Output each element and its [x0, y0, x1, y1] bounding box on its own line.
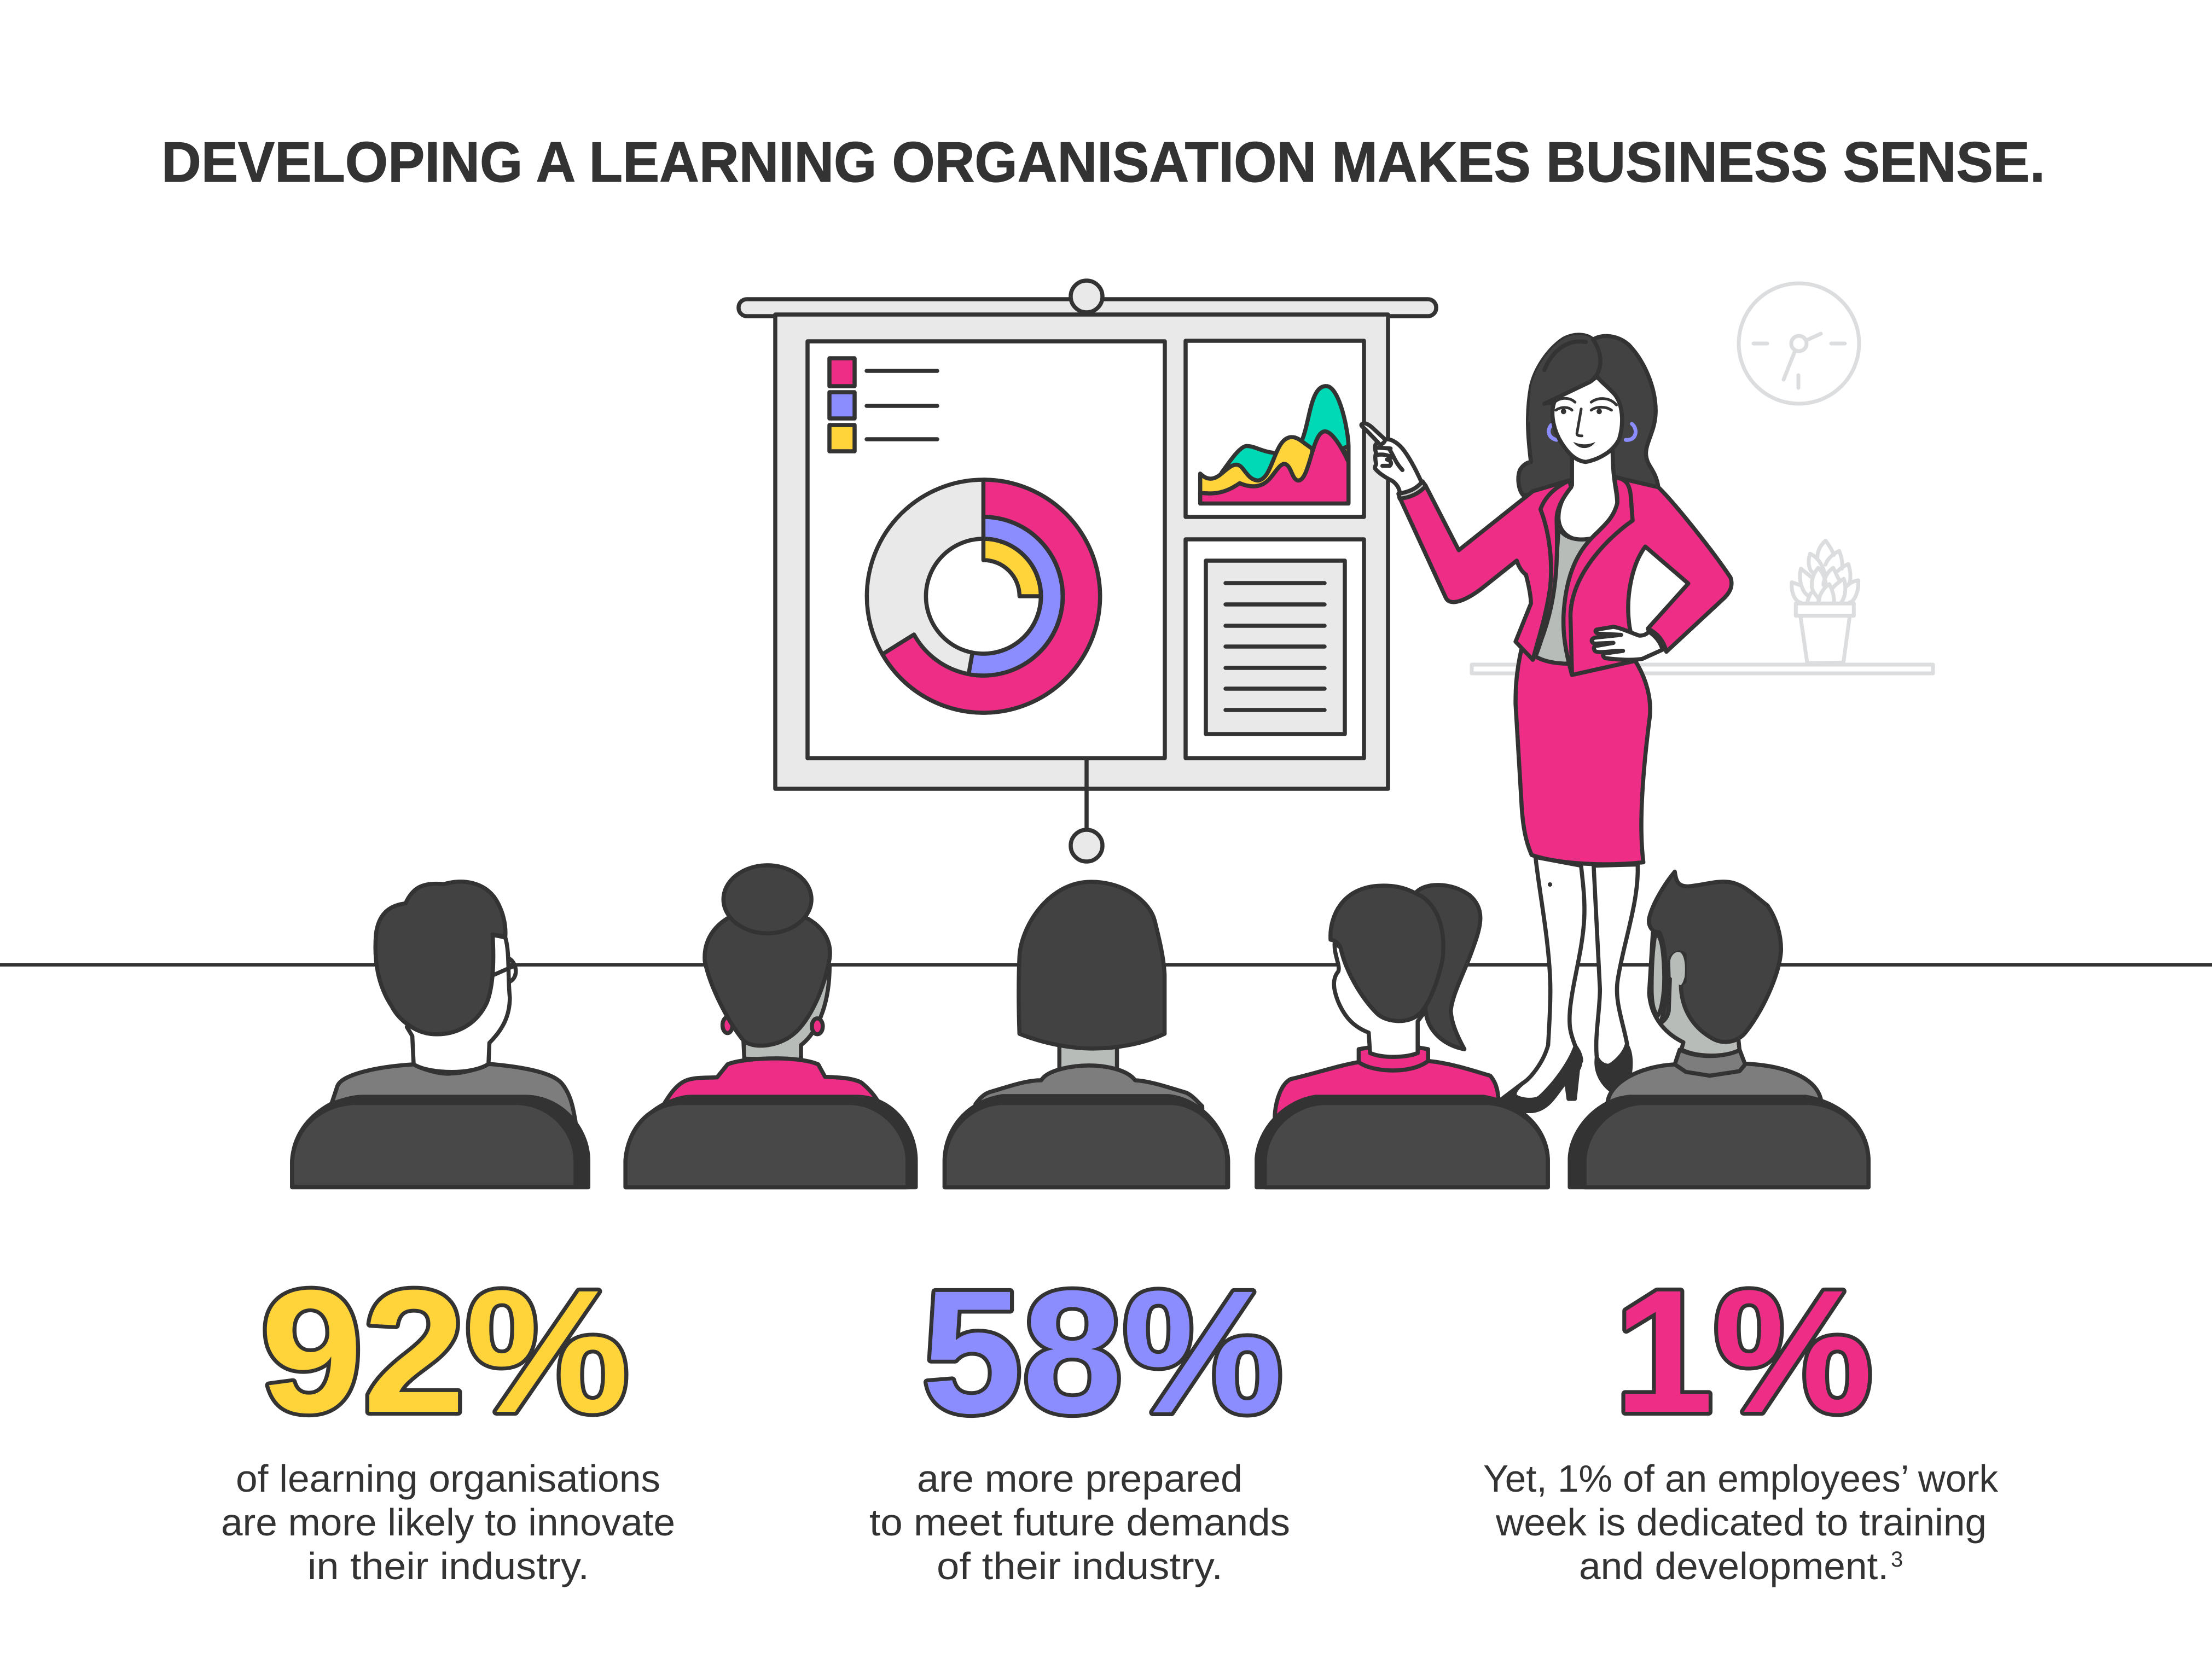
chair — [292, 1097, 588, 1188]
screen frame — [775, 315, 1388, 789]
front hair — [1528, 335, 1600, 423]
chair — [625, 1097, 916, 1188]
ponytail — [1415, 885, 1481, 1049]
icon: wall clock — [1739, 283, 1859, 404]
shelf — [1472, 665, 1933, 673]
presenter — [1361, 335, 1732, 1111]
hair bun — [723, 865, 811, 933]
caption 1%: week is dedicated to training — [1495, 1501, 1987, 1544]
legend — [829, 358, 937, 451]
chair — [945, 1096, 1228, 1188]
audience member 4 with ponytail — [1257, 885, 1548, 1188]
presenter body and head — [1401, 335, 1732, 864]
stat: 1 percent — [1483, 1253, 1999, 1587]
face — [1545, 377, 1622, 462]
neck and head skin — [744, 966, 829, 1060]
glasses lens and arm — [1652, 934, 1664, 1016]
jacket — [1607, 1064, 1821, 1120]
head and neck — [407, 935, 510, 1072]
caption 1% — [1483, 1457, 1999, 1587]
screen roller bar — [739, 299, 1436, 316]
audience member 5 with quiff — [1570, 872, 1868, 1188]
audience member 1 with glasses — [292, 882, 588, 1188]
top — [1275, 1061, 1499, 1120]
caption 58%: of their industry. — [937, 1545, 1223, 1587]
caption 92%: are more likely to innovate — [221, 1501, 675, 1544]
hair — [1649, 872, 1781, 1042]
projector screen — [739, 281, 1436, 862]
ear — [1670, 952, 1685, 985]
stat: 58 percent — [869, 1254, 1290, 1587]
figure 1%: 1% — [1614, 1253, 1873, 1449]
floor line — [0, 963, 2212, 967]
caption 1%: 3 — [1891, 1547, 1903, 1572]
stat: 92 percent — [221, 1253, 675, 1587]
hair — [375, 882, 506, 1034]
area chart — [1200, 386, 1349, 504]
jacket left side and pointing arm — [1401, 480, 1571, 660]
back hair — [1518, 335, 1658, 495]
caption 58% — [869, 1457, 1290, 1587]
hand on hip — [1592, 627, 1667, 660]
jacket — [976, 1066, 1202, 1120]
top knob — [1071, 281, 1102, 312]
chair — [1570, 1097, 1868, 1188]
earrings — [1549, 424, 1636, 440]
skin mark on leg — [1548, 882, 1552, 887]
chair — [1257, 1097, 1548, 1188]
pull cord and knob — [1071, 758, 1102, 862]
donut chart — [867, 480, 1100, 713]
caption 92%: of learning organisations — [236, 1457, 660, 1500]
figure 92%: 92% — [260, 1253, 629, 1449]
panel: area chart slide — [1186, 341, 1364, 517]
caption 92% — [221, 1457, 675, 1587]
glasses — [494, 959, 516, 982]
presenter legs and shoes — [1501, 857, 1638, 1111]
ear — [811, 984, 820, 1006]
jacket — [664, 1058, 879, 1120]
panel: donut chart slide — [808, 341, 1165, 758]
neck and chest — [1559, 451, 1617, 540]
icon: potted plant — [1792, 540, 1859, 664]
jacket right side and arm — [1564, 477, 1732, 675]
caption 58%: are more prepared — [917, 1457, 1243, 1500]
audience member 3 with bob — [945, 882, 1228, 1188]
figure 58%: 58% — [922, 1254, 1283, 1450]
sweater — [330, 1064, 576, 1122]
caption 1%: Yet, 1% of an employees’ work — [1483, 1457, 1999, 1500]
neck — [1059, 1045, 1117, 1070]
skirt — [1516, 650, 1650, 864]
caption 1%: and development. — [1579, 1545, 1889, 1587]
facial features — [1554, 398, 1617, 448]
right earring — [812, 1019, 823, 1034]
head and neck — [1649, 933, 1739, 1056]
panel: document slide — [1186, 539, 1364, 758]
hair — [1331, 886, 1443, 1021]
caption 92%: in their industry. — [307, 1545, 589, 1587]
left earring — [723, 1017, 733, 1033]
pointing hand — [1361, 423, 1426, 499]
caption 58%: to meet future demands — [869, 1501, 1290, 1544]
hair — [705, 917, 830, 1046]
audience member 2 with bun — [625, 865, 916, 1188]
hair — [1019, 882, 1165, 1049]
collar — [1675, 1050, 1745, 1076]
head and neck — [1334, 943, 1425, 1057]
title: DEVELOPING A LEARNING ORGANISATION MAKES BUSINESS SENSE. — [161, 131, 2045, 194]
collar — [1358, 1048, 1428, 1070]
grey top — [1536, 527, 1591, 664]
